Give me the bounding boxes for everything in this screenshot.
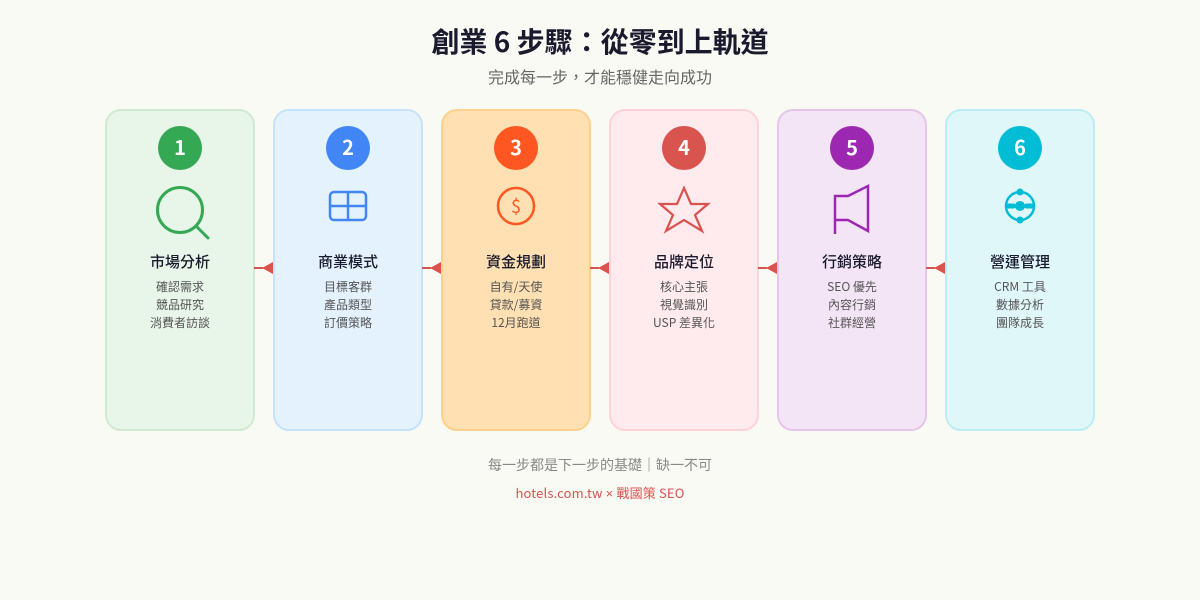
list: market analysis items [150,278,210,331]
list: funding plan items: 貸款/募資 [490,296,542,313]
arrow: step 4 to 5 [758,262,777,274]
icon: dollar coin: $ [511,193,521,219]
step number 1 [158,126,202,170]
step number 3: 3 [510,132,522,161]
icon: gear [1004,188,1036,224]
list: operations management items: CRM 工具 [994,278,1046,295]
arrow: step 5 to 6 [926,262,945,274]
list: operations management items: 數據分析 [996,296,1044,313]
list: business model items: 產品類型 [324,296,372,313]
panel: step 5 marketing strategy [777,109,927,431]
list: funding plan items [490,278,542,331]
step number 1: 1 [174,132,186,161]
step number 2: 2 [342,132,354,161]
step number 6: 6 [1014,132,1026,161]
icon: flag [834,184,870,234]
list: brand positioning items [653,278,715,331]
step number 4: 4 [678,132,690,161]
list: marketing strategy items [827,278,877,331]
step number 3 [494,126,538,170]
list: market analysis items: 消費者訪談 [150,314,210,331]
list: brand positioning items: 視覺識別 [660,296,708,313]
list: market analysis items: 競品研究 [156,296,204,313]
footer credit: hotels.com.tw × 戰國策 SEO [515,483,684,502]
list: operations management items: 團隊成長 [996,314,1044,331]
icon: magnifying glass [156,186,210,240]
footer note: 每一步都是下一步的基礎｜缺一不可 [488,455,712,475]
heading: funding plan: 資金規劃 [486,251,546,272]
step number 4 [662,126,706,170]
step number 5: 5 [846,132,858,161]
list: business model items [324,278,372,331]
list: business model items: 目標客群 [324,278,372,295]
icon: star [657,185,711,234]
heading: marketing strategy: 行銷策略 [822,251,882,272]
list: operations management items [994,278,1046,331]
list: marketing strategy items: 內容行銷 [828,296,876,313]
step number 2 [326,126,370,170]
title: 創業 6 步驟：從零到上軌道 [431,21,769,61]
list: funding plan items: 12月跑道 [491,314,541,331]
panel: step 3 funding plan [441,109,591,431]
list: funding plan items: 自有/天使 [490,278,542,295]
list: marketing strategy items: 社群經營 [828,314,876,331]
heading: business model: 商業模式 [318,251,378,272]
icon: dollar coin [496,186,536,226]
arrow: step 2 to 3 [422,262,441,274]
step number 5 [830,126,874,170]
heading: brand positioning: 品牌定位 [654,251,714,272]
panel: step 2 business model [273,109,423,431]
arrow: step 1 to 2 [254,262,273,274]
subtitle: 完成每一步，才能穩健走向成功 [488,64,712,88]
panel: step 4 brand positioning [609,109,759,431]
list: brand positioning items: USP 差異化 [653,314,715,331]
step number 6 [998,126,1042,170]
arrow: step 3 to 4 [590,262,609,274]
list: marketing strategy items: SEO 優先 [827,278,877,295]
heading: operations management: 營運管理 [990,251,1050,272]
heading: market analysis: 市場分析 [150,251,210,272]
list: brand positioning items: 核心主張 [660,278,708,295]
panel: step 1 market analysis [105,109,255,431]
panel: step 6 operations management [945,109,1095,431]
list: business model items: 訂價策略 [324,314,372,331]
icon: grid [328,190,368,222]
list: market analysis items: 確認需求 [156,278,204,295]
